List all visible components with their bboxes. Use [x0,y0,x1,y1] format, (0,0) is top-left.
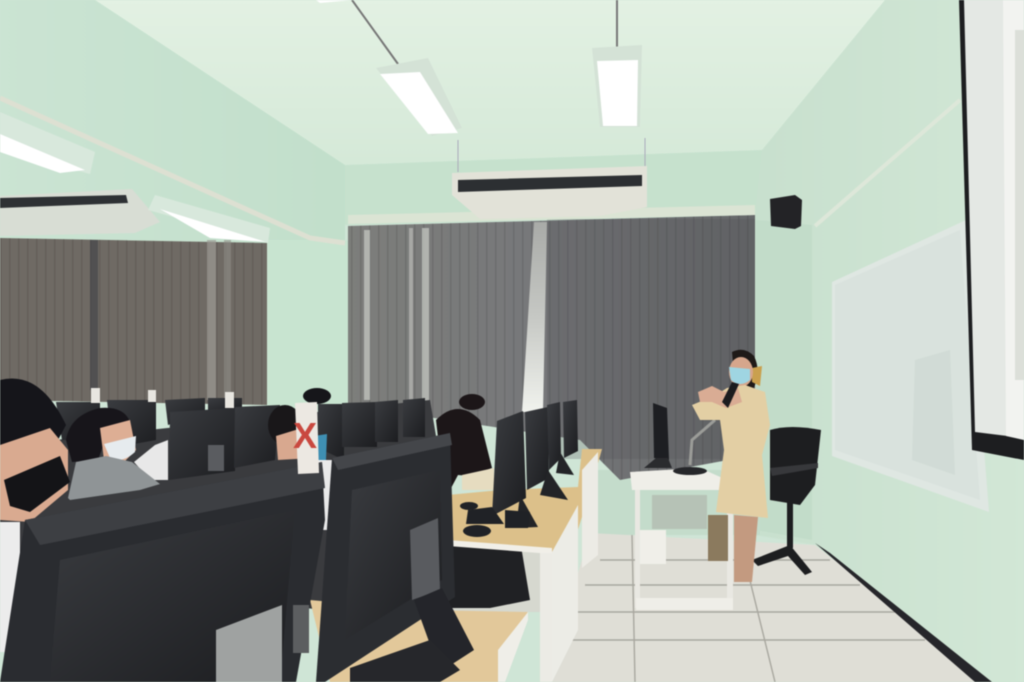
column beside the back curtain [756,220,812,540]
left air conditioner [0,189,160,236]
background behind the seated rows [0,400,450,610]
teacher dress [692,385,770,518]
teacher legs [734,515,758,582]
partially hidden student behind monitors [268,388,332,530]
left ceiling light far [148,195,270,243]
whiteboard [832,220,989,512]
student with white mask [66,408,160,500]
office chair [752,427,821,575]
center row keyboards [460,502,530,537]
teacher face [729,357,753,387]
back row left monitors [56,398,425,460]
ceiling [95,0,885,165]
wall trim lines [0,98,345,243]
red X sign: X [293,415,317,456]
ceiling light top-left [316,0,352,3]
ceiling light center [352,0,462,136]
center row desk [448,449,602,682]
student sitting center with long hair [436,394,530,608]
student far left with black mask [0,378,70,652]
back curtain [348,215,755,480]
left ceiling light near [0,112,95,174]
central air conditioner [452,138,647,219]
back wall [345,150,762,225]
front monitor left [0,462,325,682]
student behind middle monitor [134,440,168,480]
microphone in hand [722,382,739,408]
teacher desk [630,468,736,610]
teacher microphone and keyboard [673,420,715,475]
teacher [692,350,770,582]
teacher face mask [729,367,750,384]
teacher hands [698,386,742,408]
speaker [770,195,802,229]
teacher hair bow [752,366,762,386]
left wall [0,0,345,245]
teacher monitor [644,403,672,468]
red X sign [293,402,319,474]
wall column between curtains [265,240,348,410]
shadow under center desk [440,545,552,612]
right wall [755,0,1024,682]
teacher hair [732,350,758,392]
ceiling light right [592,0,642,127]
small signs [91,388,234,408]
lower back wall [590,470,760,535]
left curtain [0,238,267,405]
front monitor right [316,433,474,682]
projection screen [959,0,1024,460]
center row monitors [492,400,578,528]
middle left monitors [169,405,280,480]
floor [545,533,990,682]
front desk right [310,600,528,682]
baseboard [815,543,992,682]
window frame above curtain [348,205,755,224]
